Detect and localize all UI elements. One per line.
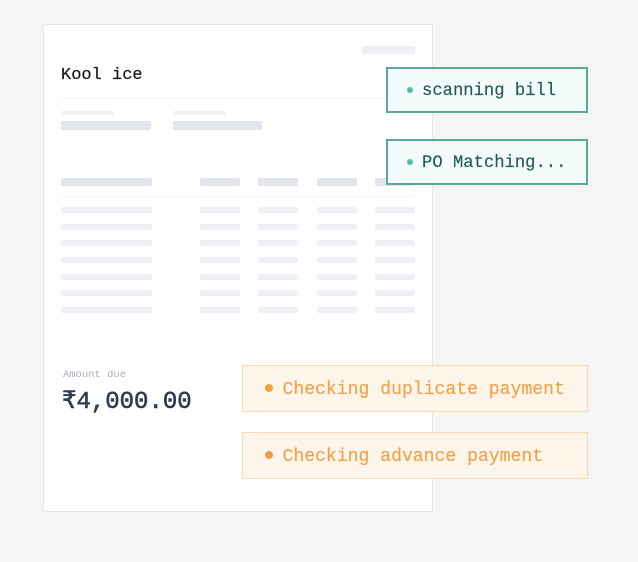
icon: teal dot — [407, 159, 413, 165]
icon: orange dot — [265, 451, 273, 459]
label: amount due: Amount due — [63, 369, 126, 381]
status text: Checking duplicate payment — [282, 380, 565, 400]
status: scanning bill — [386, 67, 588, 113]
invoice top-right placeholder — [362, 46, 415, 54]
panel: invoice card — [43, 24, 433, 512]
vendor details placeholders — [61, 98, 386, 130]
heading: vendor name: Kool ice — [61, 66, 143, 85]
table header row — [61, 178, 415, 197]
status text: Checking advance payment — [282, 447, 543, 467]
status: PO matching — [386, 139, 588, 185]
status text: PO Matching... — [422, 154, 566, 173]
amount value: ₹4,000.00 — [62, 389, 192, 416]
icon: orange dot — [265, 384, 273, 392]
status text: scanning bill — [422, 82, 556, 101]
status: checking duplicate payment — [242, 365, 588, 412]
table of line items placeholder — [61, 178, 415, 313]
status: checking advance payment — [242, 432, 588, 479]
icon: teal dot — [407, 87, 413, 93]
